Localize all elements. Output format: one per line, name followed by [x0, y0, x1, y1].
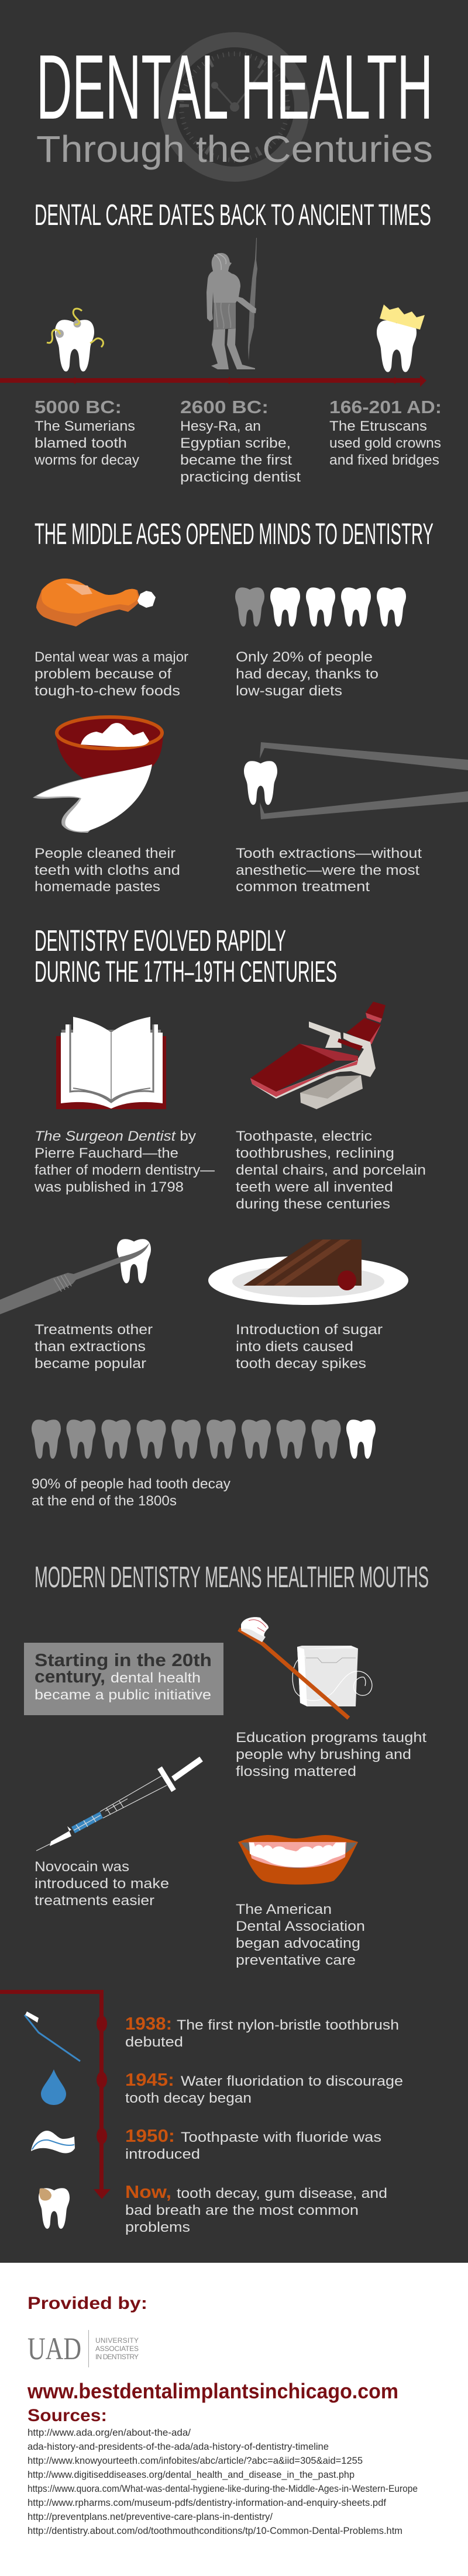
text: novocain: treatments easier: [35, 1893, 154, 1909]
text: 1950: [125, 2125, 381, 2162]
text: now: bad breath are the most common: [125, 2203, 359, 2218]
text: cleaned teeth: teeth with cloths and: [35, 863, 180, 878]
icon: chicken leg: [36, 579, 156, 626]
callout: 20th century: became a public initiative: [35, 1687, 211, 1703]
text: 2600 BC: practicing dentist: [180, 469, 301, 485]
text: dental wear: [35, 649, 188, 699]
text: sugar: tooth decay spikes: [236, 1356, 366, 1372]
icon: chocolate cake on plate: [208, 1239, 408, 1305]
text: 1950: Toothpaste with fluoride was: [181, 2130, 381, 2145]
icon: water drop: [41, 2069, 66, 2105]
icon: ten teeth, nine decayed: [32, 1419, 376, 1459]
text: 2600 BC: became the first: [180, 452, 292, 468]
text: 1945: [125, 2069, 403, 2106]
arrow: ancient timeline: [0, 375, 426, 387]
text: 166-201 AD: [329, 397, 442, 468]
text: 1938: [125, 2013, 399, 2050]
text: education programs: flossing mattered: [236, 1764, 356, 1779]
text: 5000 BC: blamed tooth: [35, 435, 127, 451]
text: dental wear: tough-to-chew foods: [35, 683, 180, 699]
text: sugar: Introduction of sugar: [236, 1322, 383, 1338]
text: The Surgeon Dentist: Pierre Fauchard—the: [35, 1145, 178, 1161]
text: 2600 BC: 2600 BC:: [180, 397, 269, 417]
icon: open book: [56, 1017, 166, 1109]
text: 1945: tooth decay began: [125, 2090, 252, 2106]
text: source list: [27, 2427, 418, 2536]
text: toothpaste inventions: Toothpaste, electric: [236, 1128, 372, 1144]
text: 90 percent: 90% of people had tooth decay: [32, 1476, 230, 1492]
heading: sources: Sources:: [27, 2406, 107, 2425]
text: treatments: [35, 1322, 153, 1372]
text: 1938: The first nylon-bristle toothbrush: [177, 2017, 399, 2033]
icon: nylon toothbrush: [25, 2011, 80, 2061]
text: 90 percent: [32, 1476, 230, 1509]
text: American Dental Association: The American: [236, 1902, 332, 1917]
text: American Dental Association: preventative care: [236, 1952, 356, 1968]
text: education programs: Education programs taught: [236, 1730, 426, 1746]
text: education programs: [236, 1730, 426, 1779]
text: The Surgeon Dentist: The Surgeon Dentist by: [35, 1128, 196, 1144]
text: cleaned teeth: homemade pastes: [35, 879, 160, 895]
text: dental wear: Dental wear was a major: [35, 649, 188, 665]
text: 1945: 1945:: [125, 2069, 174, 2090]
text: treatments: Treatments other: [35, 1322, 153, 1338]
text: source list: http://www.ada.org/en/about-the-ada/: [27, 2427, 191, 2438]
text: 5000 BC: 5000 BC:: [35, 397, 122, 417]
icon: toothbrush and floss: [239, 1617, 372, 1718]
text: sugar: into diets caused: [236, 1339, 353, 1355]
text: source list: http://www.rpharms.com/museum-pdfs/dentistry-information-and-enquiry-sheets.pdf: [27, 2497, 386, 2508]
icon: clock background: [167, 40, 302, 174]
text: American Dental Association: began advocating: [236, 1936, 360, 1951]
text: toothpaste inventions: teeth were all invented: [236, 1179, 393, 1195]
text: The Surgeon Dentist: father of modern dentistry—: [35, 1162, 215, 1178]
text: novocain: introduced to make: [35, 1876, 169, 1892]
heading: 17th-19th centuries: [35, 924, 337, 988]
text: sugar: [236, 1322, 383, 1372]
heading: provided by: Provided by:: [27, 2294, 147, 2313]
text: now: tooth decay, gum disease, and: [177, 2186, 387, 2201]
text: novocain: [35, 1859, 169, 1909]
text: source list: http://preventplans.net/preventive-care-plans-in-dentistry/: [27, 2511, 273, 2522]
text: toothpaste inventions: toothbrushes, reclining: [236, 1145, 394, 1161]
icon: dental chair: [250, 1002, 386, 1109]
icon: decayed tooth: [39, 2188, 70, 2229]
text: only 20 percent: had decay, thanks to: [236, 666, 378, 682]
text: American Dental Association: Dental Association: [236, 1919, 365, 1934]
text: source list: http://www.knowyourteeth.com/infobites/abc/article/?abc=a&iid=305&aid=1255: [27, 2455, 363, 2466]
text: only 20 percent: [236, 649, 378, 699]
text: American Dental Association: [236, 1902, 365, 1968]
text: 1938: debuted: [125, 2034, 183, 2050]
icon: dental scaler and tooth: [0, 1239, 151, 1314]
text: 5000 BC: The Sumerians: [35, 418, 135, 434]
text: toothpaste inventions: [236, 1128, 426, 1212]
text: The Surgeon Dentist: [34, 1128, 215, 1195]
text: source list: http://dentistry.about.com/od/toothmouthconditions/tp/10-Common-Dental-Problems.htm: [27, 2525, 402, 2536]
arrow: modern timeline: [0, 1990, 111, 2199]
text: 2600 BC: Egyptian scribe,: [180, 435, 291, 451]
text: tooth extractions: Tooth extractions—without: [236, 846, 422, 861]
icon: forceps and tooth: [244, 742, 468, 819]
text: 90 percent: at the end of the 1800s: [32, 1493, 177, 1509]
callout: 20th century: century,: [35, 1666, 105, 1687]
text: 166-201 AD: and fixed bridges: [329, 452, 439, 468]
text: toothpaste inventions: during these centuries: [236, 1196, 390, 1212]
text: 5000 BC: worms for decay: [34, 452, 139, 468]
text: treatments: than extractions: [35, 1339, 146, 1355]
text: 5000 BC: [34, 397, 139, 468]
text: education programs: people why brushing and: [236, 1747, 411, 1763]
logo: UAD: [27, 2330, 139, 2367]
text: dental wear: problem because of: [35, 666, 171, 682]
text: only 20 percent: Only 20% of people: [236, 649, 373, 665]
text: 2600 BC: [180, 397, 301, 485]
icon: Egyptian scribe Hesy-Ra: [207, 238, 257, 369]
text: 1945: Water fluoridation to discourage: [181, 2073, 403, 2089]
text: tooth extractions: anesthetic—were the most: [236, 863, 419, 878]
text: now: Now,: [125, 2182, 171, 2202]
text: source list: ada-history-and-presidents-of-the-ada/ada-history-of-dentistry-timeline: [27, 2441, 329, 2452]
text: 2600 BC: Hesy-Ra, an: [180, 418, 261, 434]
logo: UAD: UAD: [27, 2331, 81, 2366]
website url: www.bestdentalimplantsinchicago.com: [27, 2379, 398, 2403]
text: 166-201 AD: used gold crowns: [329, 435, 441, 451]
icon: toothpaste squiggle: [31, 2131, 75, 2153]
icon: tooth with worms: [47, 309, 103, 372]
text: The Surgeon Dentist: was published in 1798: [34, 1179, 184, 1195]
text: toothpaste inventions: dental chairs, and porcelain: [236, 1162, 426, 1178]
icon: tooth with gold crown: [377, 304, 425, 372]
logo: UAD: IN DENTISTRY: [95, 2353, 139, 2361]
logo: UAD: UNIVERSITY: [95, 2336, 139, 2345]
icon: five teeth, one decayed: [235, 587, 406, 626]
text: only 20 percent: low-sugar diets: [236, 683, 342, 699]
text: treatments: became popular: [35, 1356, 146, 1372]
icon: novocain syringe: [36, 1759, 201, 1851]
text: source list: http://www.digitiseddiseases.org/dental_health_and_disease_in_the_past.php: [27, 2469, 355, 2480]
subtitle: Through the Centuries: [36, 128, 433, 170]
callout: 20th century: Starting in the 20th: [35, 1650, 212, 1670]
text: 1938: 1938:: [125, 2013, 172, 2034]
icon: smiling lips: [238, 1835, 358, 1885]
text: cleaned teeth: [35, 846, 180, 895]
callout: 20th century: [24, 1643, 223, 1715]
logo: UAD: ASSOCIATES: [95, 2345, 139, 2353]
text: now: problems: [125, 2220, 190, 2235]
callout: 20th century: dental health: [111, 1670, 201, 1686]
icon: bowl and cloth: [33, 717, 163, 833]
text: 166-201 AD: The Etruscans: [329, 418, 427, 434]
text: 1950: 1950:: [125, 2125, 175, 2146]
text: novocain: Novocain was: [35, 1859, 129, 1875]
text: source list: https://www.quora.com/What-was-dental-hygiene-like-during-the-Middle-Ages-in-Western-Europe: [27, 2483, 418, 2494]
text: 1950: introduced: [125, 2146, 200, 2162]
text: 166-201 AD: 166-201 AD:: [329, 397, 442, 417]
text: tooth extractions: common treatment: [236, 879, 370, 895]
text: cleaned teeth: People cleaned their: [35, 846, 176, 861]
text: tooth extractions: [236, 846, 422, 895]
text: now: [125, 2182, 387, 2235]
